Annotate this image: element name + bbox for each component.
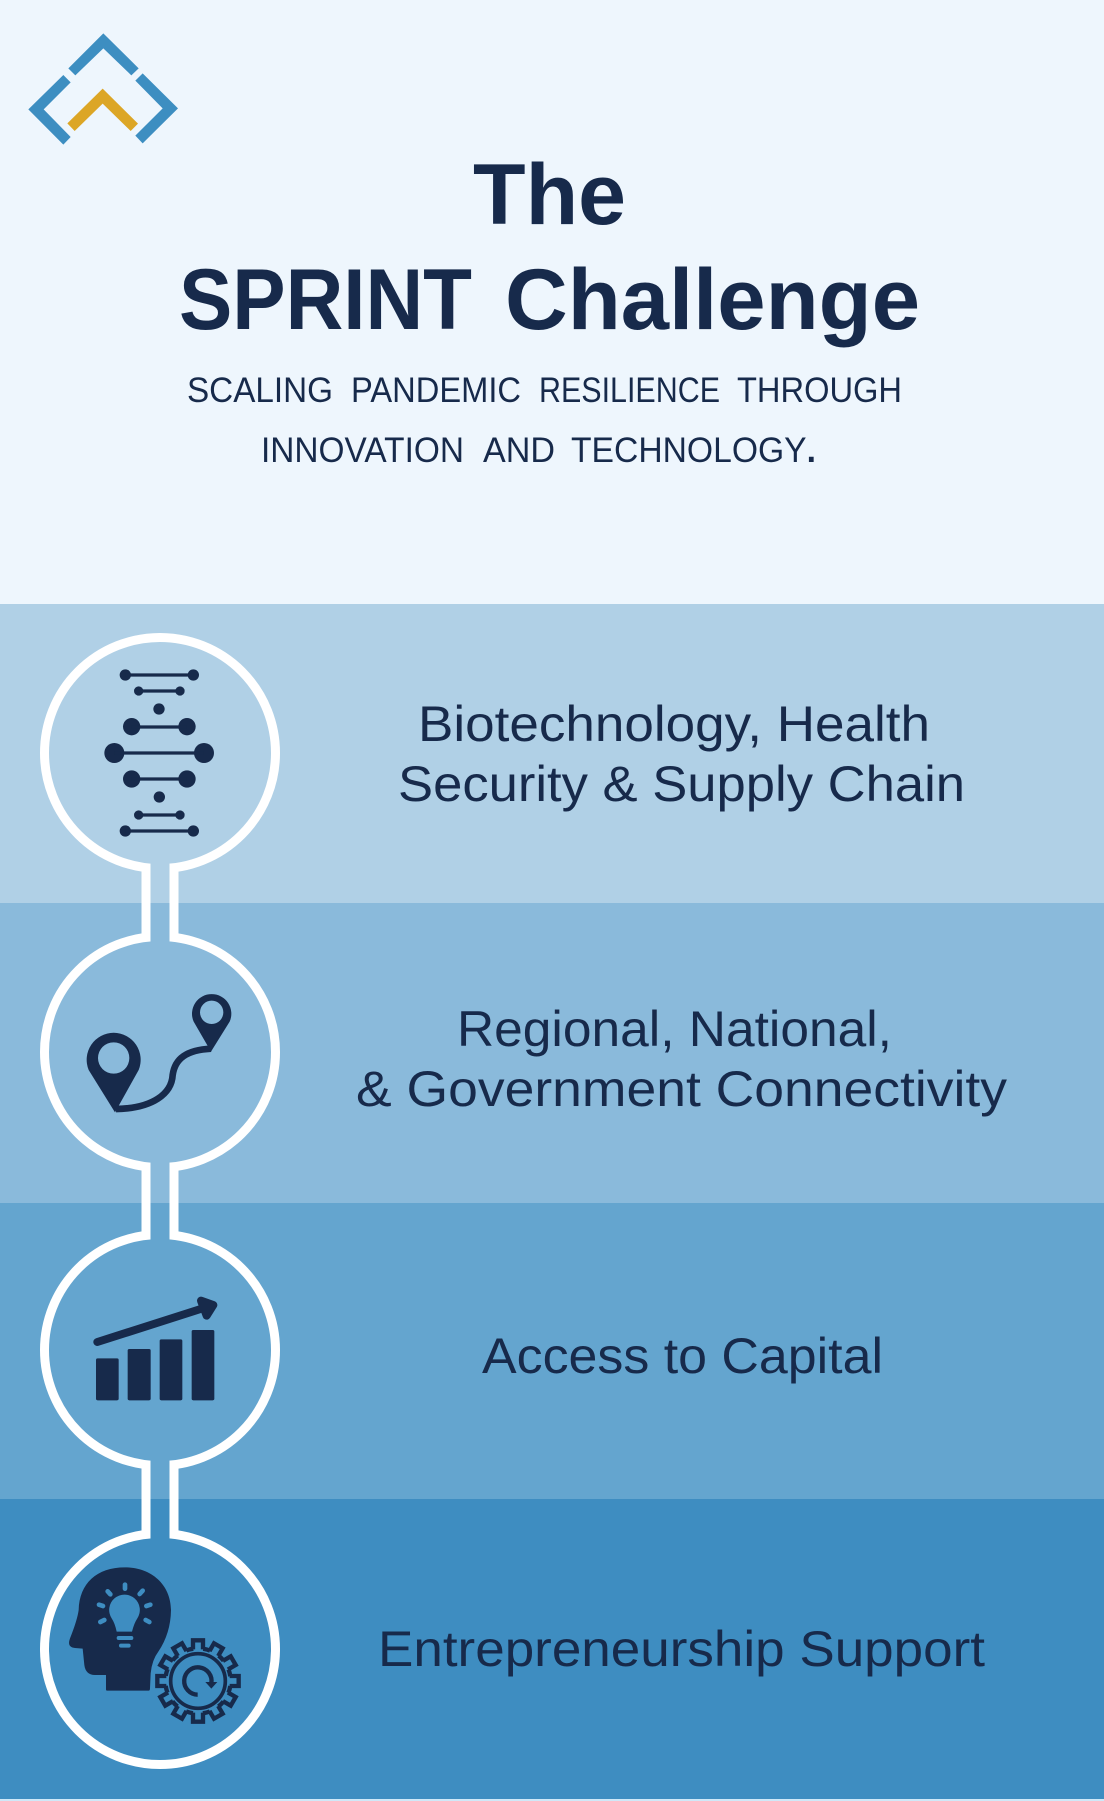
label: biotechnology: Biotechnology, Health — [418, 696, 930, 752]
subtitle: PANDEMIC — [351, 371, 521, 410]
icon: head with light bulb and gear — [69, 1567, 239, 1722]
subtitle: SCALING — [187, 371, 333, 410]
subtitle: RESILIENCE — [539, 371, 720, 410]
label: entrepreneurship support: Entrepreneurship Support — [378, 1621, 985, 1677]
title: Challenge — [505, 252, 920, 348]
icon: rising bar chart with arrow — [96, 1301, 214, 1400]
connectors between circles — [142, 865, 178, 1537]
panel: header — [0, 0, 1104, 604]
label: biotechnology — [398, 696, 965, 812]
subtitle: THROUGH — [737, 371, 902, 410]
label: connectivity — [356, 1001, 1007, 1117]
label: access to capital: Access to Capital — [482, 1328, 883, 1384]
title: SPRINT — [179, 252, 472, 348]
panel: entrepreneurship support — [0, 1499, 1104, 1799]
label: biotechnology: Security & Supply Chain — [398, 756, 965, 812]
subtitle — [187, 371, 902, 470]
subtitle: AND — [483, 431, 555, 470]
subtitle: TECHNOLOGY. — [571, 431, 816, 470]
label: connectivity: Regional, National, — [457, 1001, 892, 1057]
title: The — [473, 147, 626, 243]
icon: map pins with route — [87, 994, 231, 1112]
icon: logo — [28, 33, 178, 145]
panel: regional, national and government connectivity — [0, 903, 1104, 1203]
label: connectivity: & Government Connectivity — [356, 1061, 1007, 1117]
subtitle: INNOVATION — [261, 431, 464, 470]
title — [179, 147, 920, 348]
panel: access to capital — [0, 1203, 1104, 1499]
icon: DNA strand — [104, 669, 214, 837]
panel: biotechnology, health security and supply chain — [0, 604, 1104, 903]
